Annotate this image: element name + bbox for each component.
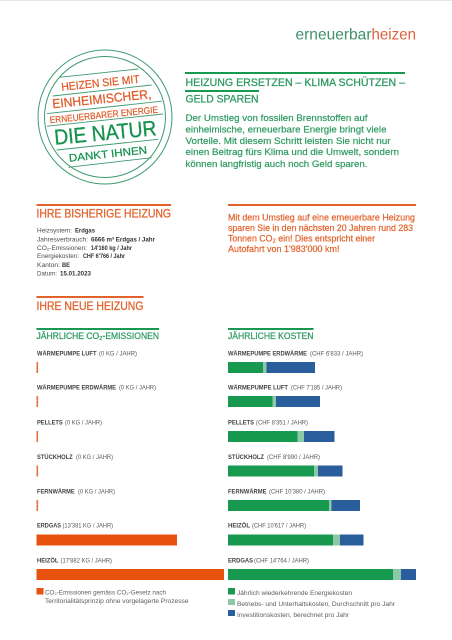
bar chart: annual costs: [228, 350, 416, 580]
intro text block: [186, 113, 399, 169]
details: current heating: Energiekosten:: [37, 253, 79, 260]
details: current heating: [37, 228, 156, 278]
details: current heating: CO₂-Emissionen:: [37, 245, 87, 252]
details: current heating: 6666 m³ Erdgas / Jahr: [91, 236, 156, 243]
bar chart: CO2 emissions: WÄRMEPUMPE ERDWÄRME: [37, 385, 116, 392]
intro text block: Der Umstieg von fossilen Brennstoffen auf: [186, 113, 368, 123]
bar chart: annual costs: WÄRMEPUMPE ERDWÄRME: [228, 350, 307, 358]
bar chart: CO2 emissions: (0 KG / JAHR): [65, 420, 102, 426]
details: current heating: Jahresverbrauch:: [37, 236, 88, 243]
bar chart: CO2 emissions: (17'882 KG / JAHR): [60, 559, 112, 565]
bar chart: annual costs: (CHF 14'764 / JAHR): [254, 559, 309, 565]
heading: Ihre neue Heizung: IHRE NEUE HEIZUNG: [36, 299, 144, 313]
bar chart: CO2 emissions: HEIZÖL: [37, 558, 59, 565]
legend: annual costs: Betriebs- und Unterhaltskosten, Durchschnitt pro Jahr: [237, 601, 396, 608]
stamp badge: DANKT IHNEN: [68, 145, 148, 165]
bar chart: CO2 emissions: PELLETS: [37, 420, 63, 426]
bar chart: CO2 emissions: ERDGAS: [37, 523, 61, 530]
bar chart: annual costs: STÜCKHOLZ: [228, 454, 264, 461]
heading: Heizung ersetzen: GELD SPAREN: [186, 94, 258, 106]
details: current heating: 14'160 kg / Jahr: [91, 245, 133, 252]
details: current heating: Heizsystem:: [37, 228, 72, 235]
bar chart: annual costs: WÄRMEPUMPE LUFT: [228, 385, 288, 392]
legend: annual costs: Investitionskosten, berechnet pro Jahr: [237, 612, 350, 619]
bar chart: annual costs: FERNWÄRME: [228, 489, 266, 496]
heading: Ihre bisherige Heizung: IHRE BISHERIGE HEIZUNG: [36, 206, 171, 220]
bar chart: CO2 emissions: (0 KG / JAHR): [119, 386, 156, 392]
legend: annual costs: Jährlich wiederkehrende Energiekosten: [237, 590, 352, 597]
intro text block: können langfristig auch noch Geld sparen.: [186, 159, 368, 169]
stamp badge: [38, 50, 172, 184]
legend: CO2 emissions: CO₂-Emissionen gemäss CO₂-Gesetz nach: [45, 590, 166, 596]
details: current heating: BE: [62, 262, 70, 269]
heading: CO2 emissions chart: JÄHRLICHE CO₂-EMISSIONEN: [36, 331, 159, 341]
stamp badge: ERNEUERBARER ENERGIE: [49, 104, 158, 125]
details: current heating: Kanton:: [37, 262, 60, 269]
stamp badge: DIE NATUR: [53, 116, 158, 150]
details: current heating: Datum:: [37, 271, 57, 278]
bar chart: annual costs: HEIZÖL: [228, 523, 250, 530]
bar chart: CO2 emissions: (0 KG / JAHR): [99, 352, 137, 358]
intro text block: einen Beitrag fürs Klima und die Umwelt, sondern: [186, 147, 399, 157]
intro text block: Vorteile. Mit diesem Schritt leisten Sie nicht nur: [186, 136, 390, 146]
bar chart: CO2 emissions: WÄRMEPUMPE LUFT: [37, 350, 97, 358]
bar chart: annual costs: (CHF 6'833 / JAHR): [310, 352, 363, 358]
logo: erneuerbarheizen: [296, 26, 416, 44]
bar chart: annual costs: (CHF 8'990 / JAHR): [267, 455, 320, 461]
callout: CO2 savings: [228, 204, 416, 254]
bar chart: CO2 emissions: FERNWÄRME: [37, 489, 75, 496]
callout: CO2 savings: sparen Sie in den nächsten 20 Jahren rund 283: [228, 223, 413, 233]
bar chart: annual costs: PELLETS: [228, 420, 254, 426]
callout: CO2 savings: Autofahrt von 1'983'000 km!: [228, 244, 340, 254]
callout: CO2 savings: Mit dem Umstieg auf eine erneuerbare Heizung: [228, 213, 415, 223]
heading: Heizung ersetzen: HEIZUNG ERSETZEN – KLIMA SCHÜTZEN –: [186, 77, 406, 89]
bar chart: annual costs: ERDGAS: [228, 558, 253, 565]
details: current heating: CHF 6'766 / Jahr: [83, 253, 126, 260]
bar chart: CO2 emissions: (13'381 KG / JAHR): [62, 524, 113, 530]
bar chart: annual costs: (CHF 10'617 / JAHR): [252, 524, 306, 530]
stamp badge: HEIZEN SIE MIT: [61, 74, 140, 94]
details: current heating: Erdgas: [75, 228, 96, 235]
legend: CO2 emissions: Territorialitätsprinzip ohne vorgelagerte Prozesse: [45, 598, 189, 605]
stamp badge: EINHEIMISCHER,: [51, 86, 152, 111]
logo: erneuerbarheizen: erneuerbar: [296, 26, 372, 44]
logo: erneuerbarheizen: heizen: [372, 26, 416, 44]
bar chart: annual costs: (CHF 7'185 / JAHR): [291, 386, 342, 392]
details: current heating: 15.01.2023: [60, 271, 92, 278]
legend: CO2 emissions: [36, 588, 189, 605]
heading: annual costs chart: JÄHRLICHE KOSTEN: [228, 331, 314, 341]
bar chart: CO2 emissions: STÜCKHOLZ: [37, 454, 73, 461]
bar chart: CO2 emissions: [36, 350, 224, 580]
intro text block: einheimische, erneuerbare Energie bringt viele: [186, 125, 386, 135]
legend: annual costs: [228, 588, 396, 619]
bar chart: CO2 emissions: (0 KG / JAHR): [76, 455, 113, 461]
callout: CO2 savings: Tonnen CO₂ ein! Dies entspricht einer: [228, 234, 375, 244]
bar chart: annual costs: (CHF 8'351 / JAHR): [256, 420, 308, 426]
heading: Heizung ersetzen: [185, 72, 406, 106]
bar chart: CO2 emissions: (0 KG / JAHR): [78, 490, 115, 496]
bar chart: annual costs: (CHF 10'380 / JAHR): [269, 490, 325, 496]
